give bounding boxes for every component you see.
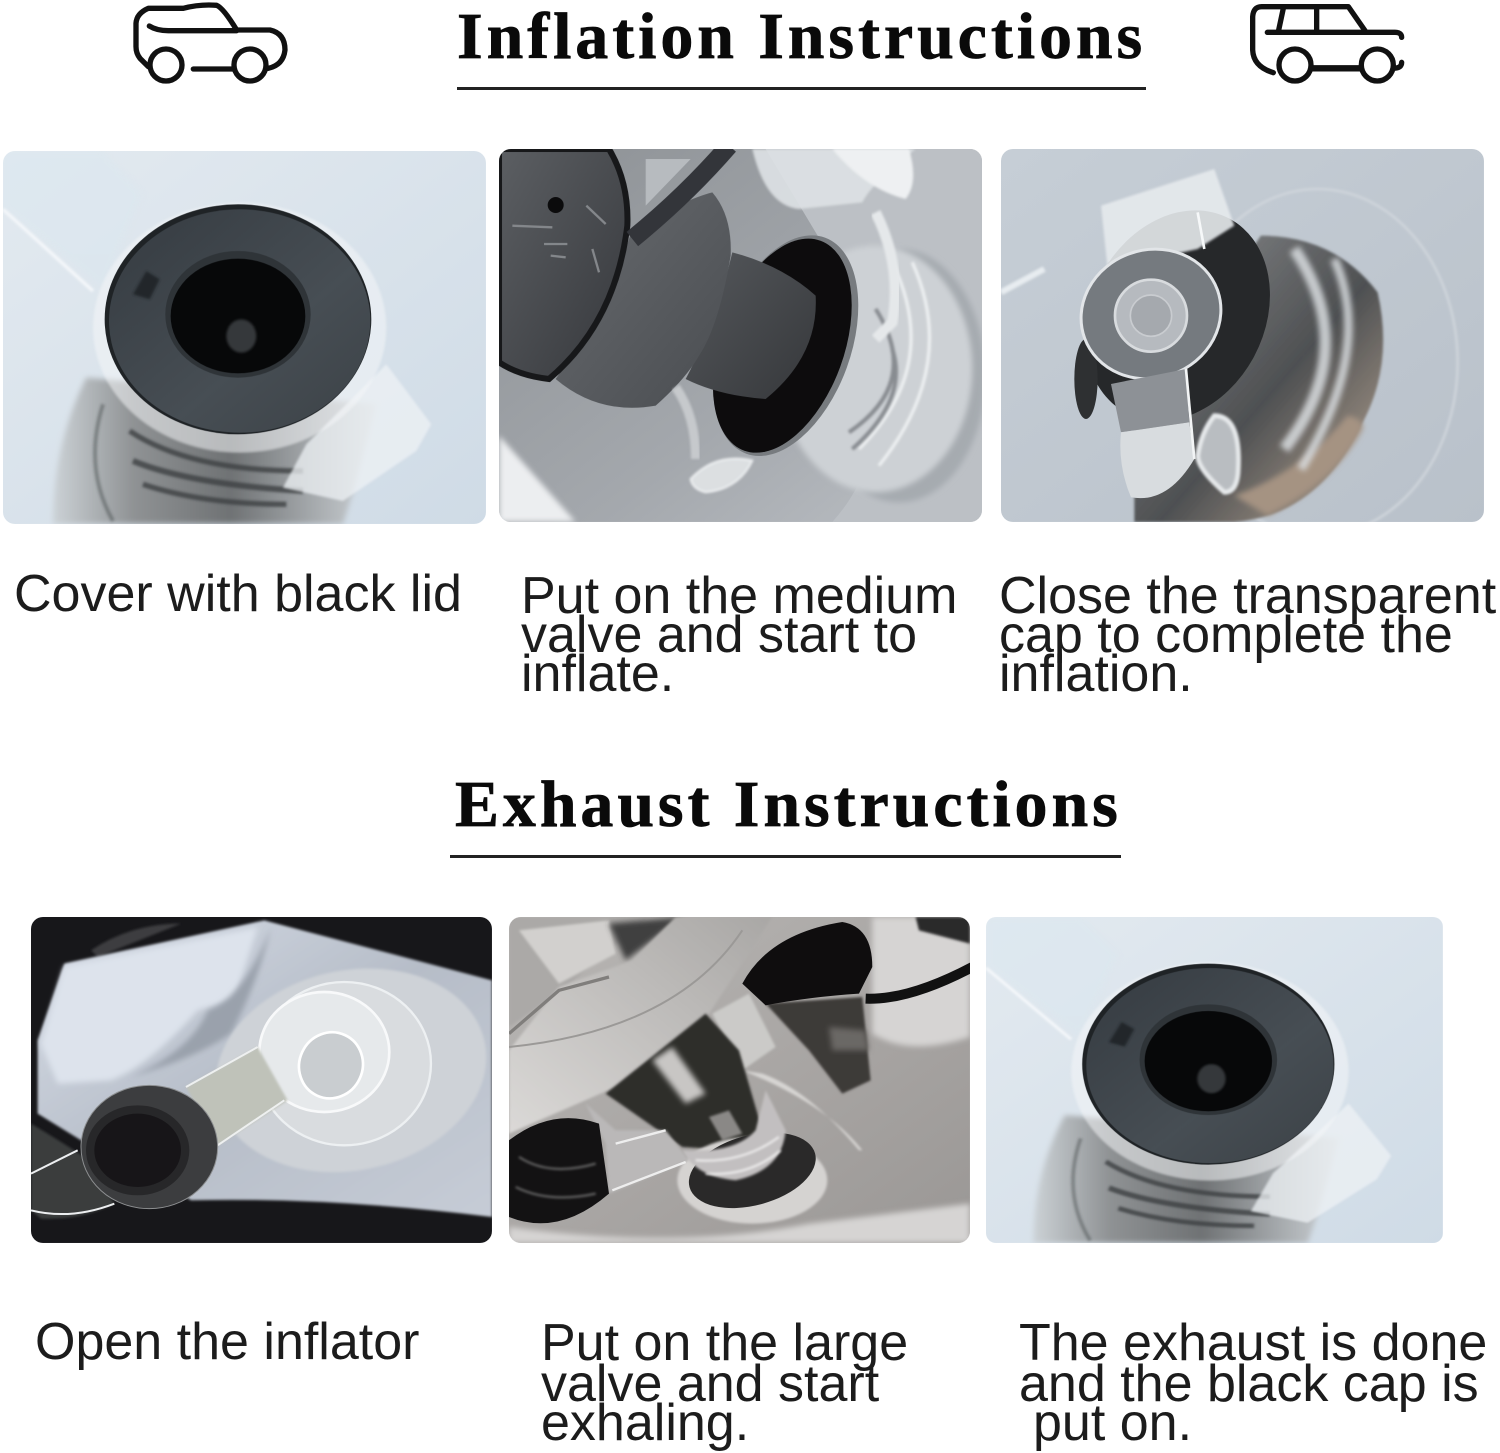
- caption: cover with black lid: Cover with black lid: [14, 565, 462, 623]
- icon: car right: [1253, 7, 1402, 81]
- caption: put on the medium valve: inflate.: [521, 645, 674, 703]
- title: inflation instructions: Inflation Instructions: [457, 0, 1146, 73]
- caption: put on the large valve: exhaling.: [541, 1394, 749, 1452]
- caption: open the inflator: Open the inflator: [35, 1313, 419, 1371]
- icon: car left: [136, 5, 285, 81]
- caption: put on the large valve: valve and start: [541, 1355, 880, 1413]
- photo: cover with black lid: [3, 151, 486, 524]
- caption: the exhaust is done: The exhaust is done: [1019, 1314, 1487, 1372]
- caption: close the transparent cap: inflation.: [999, 645, 1193, 703]
- photo: black cap put on: [986, 917, 1443, 1243]
- caption: the exhaust is done: and the black cap is: [1019, 1355, 1479, 1413]
- photo: close the transparent cap: [1001, 149, 1484, 536]
- caption: put on the medium valve: valve and start to: [521, 606, 917, 664]
- caption: close the transparent cap: cap to complete the: [999, 606, 1453, 664]
- photo: put on the large valve: [509, 917, 972, 1243]
- caption: put on the medium valve: Put on the medium: [521, 567, 957, 625]
- caption: the exhaust is done: put on.: [1033, 1394, 1192, 1452]
- title: exhaust instructions: Exhaust Instructions: [455, 768, 1122, 841]
- photo: put on the medium valve: [499, 146, 986, 522]
- caption: put on the large valve: Put on the large: [541, 1314, 908, 1372]
- photo: open the inflator: [31, 917, 505, 1243]
- caption: close the transparent cap: Close the transparent: [999, 567, 1497, 625]
